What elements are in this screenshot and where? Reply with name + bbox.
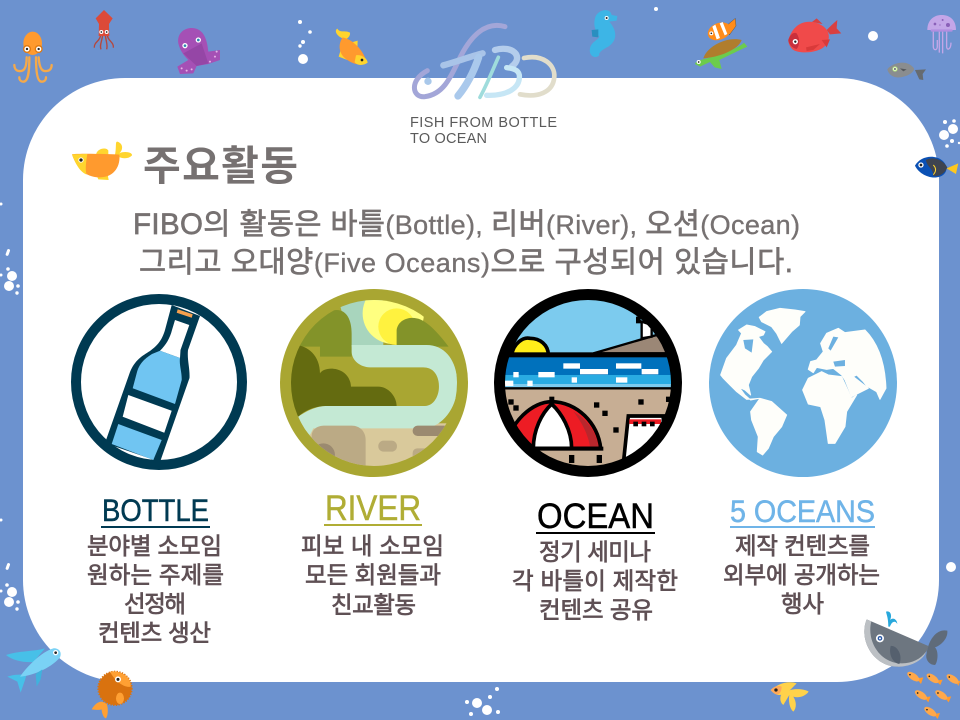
icon: purple octopus xyxy=(177,28,220,74)
section: bottle: 선정해 xyxy=(124,591,186,617)
section: ocean: 정기 세미나 xyxy=(539,539,651,565)
icon: purple jellyfish xyxy=(927,15,956,53)
logo tagline xyxy=(410,115,557,147)
icon: clownfish and green turtle fish xyxy=(695,18,747,69)
section: river: 피보 내 소모임 xyxy=(301,533,444,559)
icon: yellow goldfish xyxy=(771,682,809,712)
section: bottle: BOTTLE xyxy=(102,492,209,528)
icon: orange pufferfish xyxy=(92,671,132,718)
icon: red squid xyxy=(94,10,113,49)
section: 5 oceans: 외부에 공개하는 xyxy=(723,562,880,588)
section: bottle xyxy=(87,492,224,646)
icon: school of small orange fish xyxy=(906,670,960,719)
section: bottle: 분야별 소모임 xyxy=(87,533,222,559)
section: 5 oceans: 제작 컨텐츠를 xyxy=(735,533,870,559)
section: 5 oceans: 행사 xyxy=(781,591,824,617)
icon: goldfish beside heading xyxy=(72,142,132,180)
section: bottle: 원하는 주제를 xyxy=(87,562,224,588)
section: 5 oceans xyxy=(723,493,880,617)
icon: world globe xyxy=(709,289,897,477)
intro text xyxy=(133,208,800,279)
icon: bottle xyxy=(76,299,242,465)
icon: red fish xyxy=(788,18,841,52)
logo tagline: FISH FROM BOTTLE xyxy=(410,115,557,131)
logo tagline: TO OCEAN xyxy=(410,131,487,147)
icon: blue tang fish xyxy=(915,157,958,178)
icon: river landscape xyxy=(280,283,468,477)
section: river: 모든 회원들과 xyxy=(305,562,441,588)
section: river xyxy=(301,489,444,618)
section: river: RIVER xyxy=(325,489,421,528)
icon: whale xyxy=(864,611,947,667)
intro text: 그리고 오대양(Five Oceans)으로 구성되어 있습니다. xyxy=(139,246,793,279)
intro text: FIBO의 활동은 바틀(Bottle), 리버(River), 오션(Ocean) xyxy=(133,208,800,241)
icon: orange octopus xyxy=(14,32,52,82)
icon: ocean beach scene xyxy=(497,293,683,482)
section: ocean: OCEAN xyxy=(537,497,654,536)
section: 5 oceans: 5 OCEANS xyxy=(730,493,875,529)
icon: flying fish xyxy=(6,648,61,693)
section: ocean xyxy=(512,497,678,623)
section: ocean: 컨텐츠 공유 xyxy=(539,597,653,623)
section: river: 친교활동 xyxy=(331,592,416,618)
logo: FIBO swoosh lettering xyxy=(414,25,554,97)
icon: grey fish xyxy=(887,63,926,80)
section: bottle: 컨텐츠 생산 xyxy=(98,620,211,646)
heading: 주요활동 xyxy=(143,143,298,189)
section: ocean: 각 바틀이 제작한 xyxy=(512,568,678,594)
icon: seahorse xyxy=(590,10,617,57)
icon: koi fish xyxy=(336,29,368,65)
